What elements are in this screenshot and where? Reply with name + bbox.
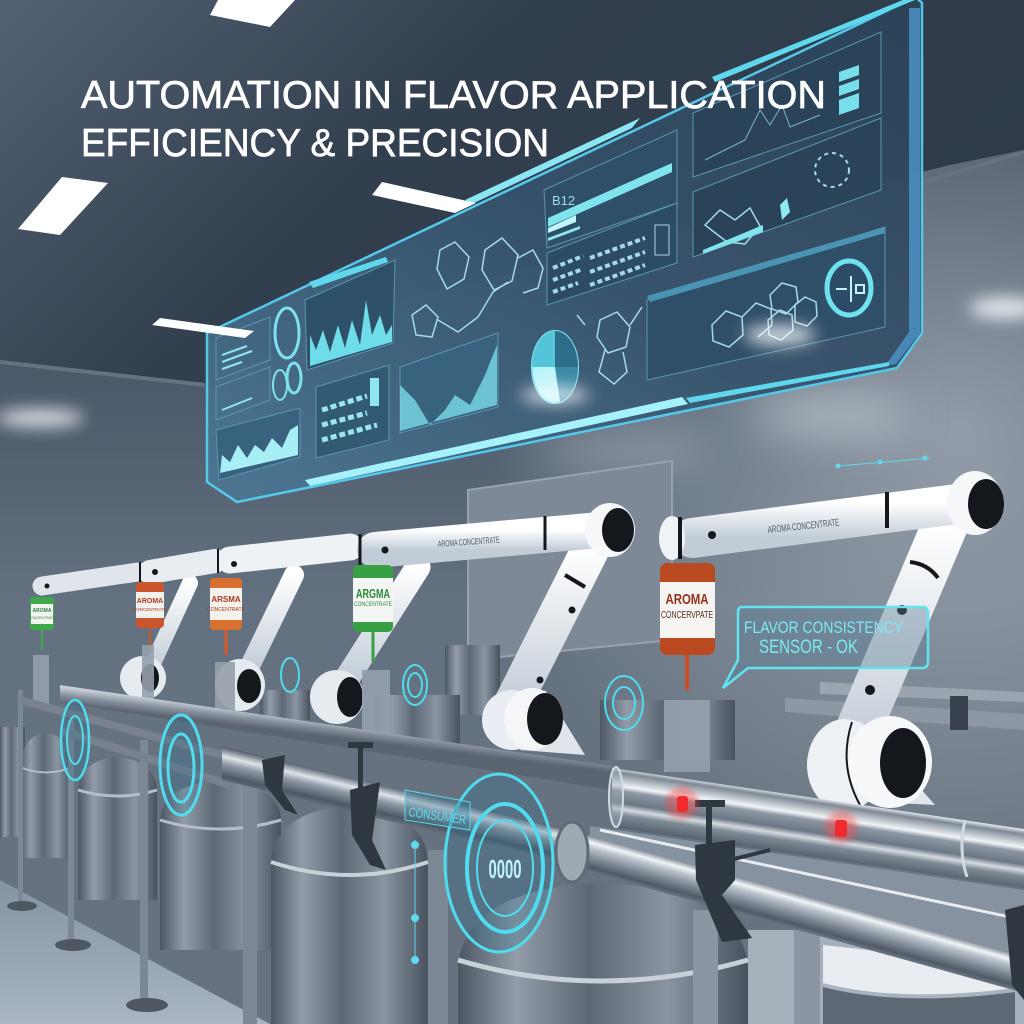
holographic dashboard panel xyxy=(207,0,922,502)
status dots line xyxy=(836,456,930,468)
wall-ceiling trim xyxy=(0,152,1024,385)
bottle: medium orange: ARSMA xyxy=(211,595,241,604)
robot arm 4 xyxy=(360,503,635,755)
panel glow border bands xyxy=(305,0,920,486)
post feet xyxy=(7,901,168,1012)
panel: upper right molecule xyxy=(693,118,881,257)
bottle: large green: ARGMA xyxy=(356,586,390,601)
area chart: waveform xyxy=(400,333,498,433)
thin rail above main pipe xyxy=(600,830,1024,920)
stainless tanks xyxy=(0,727,1015,1024)
panel: equipment readout xyxy=(316,365,389,458)
panel: system readouts xyxy=(216,317,270,420)
conveyor belt xyxy=(590,826,1024,965)
holographic gauge: small left xyxy=(61,700,89,780)
bottle: small green: AROMA xyxy=(33,608,52,614)
wall highlights xyxy=(0,297,1024,464)
floor xyxy=(0,880,270,1024)
title: AUTOMATION IN FLAVOR APPLICATION xyxy=(81,74,826,117)
holographic gauge: medium xyxy=(160,715,202,815)
tank 4 xyxy=(78,757,157,900)
tank 5 xyxy=(20,733,72,858)
bottle: large orange: CONCERVPATE xyxy=(661,610,713,621)
panel: data table xyxy=(547,203,677,305)
area chart: spectrum xyxy=(305,260,395,370)
robot arm 1 xyxy=(42,561,215,700)
bottle: medium orange xyxy=(207,578,246,655)
conveyor top rail xyxy=(60,685,612,790)
support posts xyxy=(18,690,820,1024)
title: EFFICIENCY & PRECISION xyxy=(81,122,549,165)
robot arm 3 xyxy=(310,567,418,724)
title xyxy=(81,74,826,165)
tank 6 xyxy=(0,727,25,837)
tank 1 xyxy=(458,883,748,1024)
bar chart: lower left xyxy=(216,408,300,480)
bottle: small orange: CONCENTRATE xyxy=(133,607,167,612)
holographic gauge: back row xyxy=(281,658,643,730)
holographic gauge: large xyxy=(445,774,553,952)
dispensing nozzles xyxy=(33,645,710,772)
back pipes, left xyxy=(20,700,230,785)
bottle: medium orange: CONCENTRATE xyxy=(207,607,246,613)
bottle: large orange: AROMA xyxy=(666,591,709,608)
callout: flavor consistency sensor xyxy=(723,607,928,688)
holographic data label and dots xyxy=(405,790,470,964)
right wall light falloff xyxy=(400,150,1024,900)
bottle: large green xyxy=(353,565,393,662)
molecule diagrams xyxy=(412,238,642,384)
callout: flavor consistency sensor: SENSOR - OK xyxy=(759,637,858,658)
panel: upper right graph xyxy=(693,32,881,177)
floor under right pipework xyxy=(748,930,1024,1024)
background tanks xyxy=(260,645,735,760)
icon: gauges xyxy=(273,308,301,400)
pipe clamps xyxy=(262,742,1024,1000)
icon: circular status ring xyxy=(827,261,871,315)
bottle: small green xyxy=(29,597,56,650)
tank 3 xyxy=(160,780,281,950)
back door panel xyxy=(468,461,672,660)
bottle: small orange: AROMA xyxy=(137,598,163,605)
pie chart xyxy=(532,331,578,403)
bottle: small green: CONCENTRATE xyxy=(29,616,56,620)
holographic gauge: large: 0000 xyxy=(488,854,522,884)
holographic data label and dots: CONSUMER xyxy=(408,804,467,827)
main pipe xyxy=(575,832,1024,993)
red sensor lights xyxy=(666,787,857,843)
background process line, right xyxy=(785,682,1024,730)
ceiling xyxy=(0,0,1024,400)
bottle: large green: CONCENTRATE xyxy=(354,602,392,608)
main pipe, left section xyxy=(222,746,575,867)
tank 0 xyxy=(823,985,1015,1024)
panel: progress bars: B12 xyxy=(552,193,575,208)
glass tube xyxy=(609,767,1024,888)
callout: flavor consistency sensor: FLAVOR CONSISTENCY xyxy=(744,618,903,637)
bottle: large orange xyxy=(660,563,715,690)
panel light flares xyxy=(521,325,816,403)
tank 2 xyxy=(271,805,428,1024)
robot arm 2 xyxy=(215,547,350,711)
arm label: AROMA CONCENTRATE xyxy=(437,535,500,549)
bottle: small orange xyxy=(133,582,167,653)
arm label: AROMA CONCENTRATE xyxy=(767,517,840,536)
white robot base, lower right xyxy=(823,945,1010,1010)
panel: lower right hexagons xyxy=(647,227,885,380)
pipe coupling xyxy=(556,822,588,882)
robot arm 5 xyxy=(659,471,1004,811)
panel: progress bars xyxy=(544,130,677,248)
ceiling lights xyxy=(18,0,476,338)
